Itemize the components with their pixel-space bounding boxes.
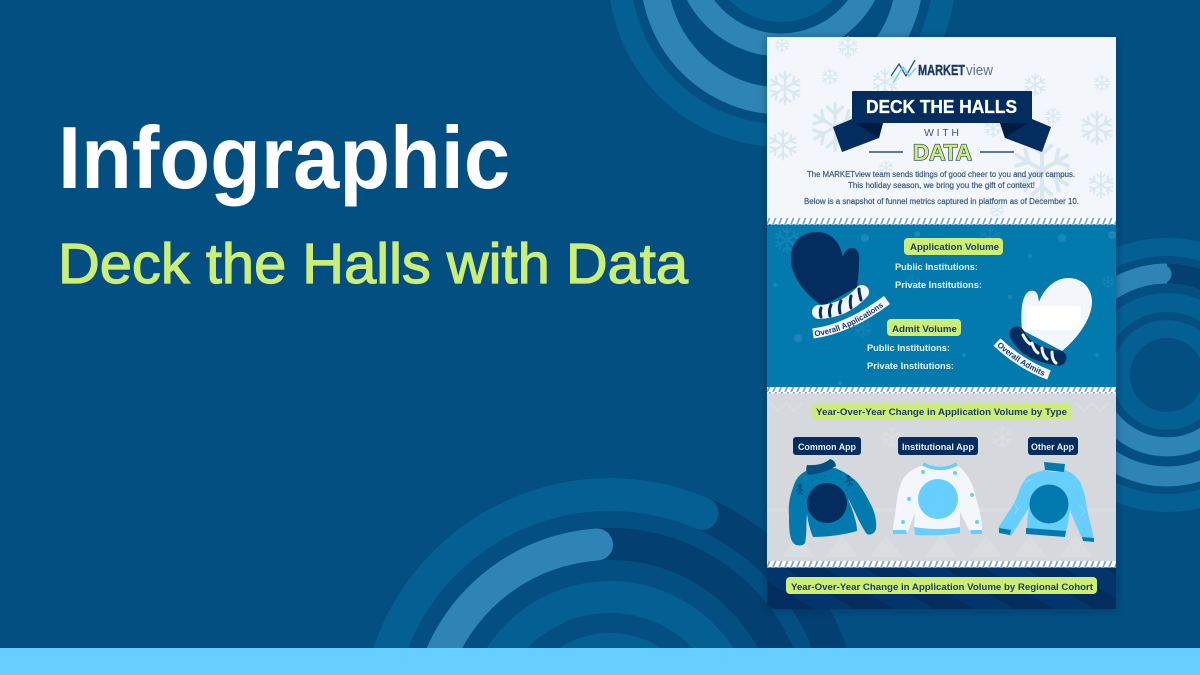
panel: intro [767, 37, 1116, 218]
panel: regional cohort [767, 561, 1116, 609]
application volume rows: Private Institutions: [895, 280, 982, 291]
heading: Infographic: Infographic [58, 108, 510, 207]
pill: Application Volume: Application Volume [910, 242, 999, 253]
text: WITH: WITH [924, 127, 959, 139]
icon: white mitten [1017, 278, 1092, 363]
icon: light blue sweater [998, 462, 1094, 542]
rope divider top [767, 218, 1116, 224]
background rings: top [610, 0, 954, 146]
pill: Admit Volume [887, 319, 961, 336]
pill: by type [812, 403, 1072, 420]
admit volume rows: Public Institutions: [867, 343, 950, 354]
icon: white sweater [893, 464, 982, 536]
application volume rows: Public Institutions: [895, 262, 978, 273]
label: Overall Applications: Overall Applications [814, 304, 883, 336]
rope divider middle [767, 387, 1116, 394]
label: Overall Admits: Overall Admits [998, 342, 1044, 376]
intro text: The MARKETview team sends tidings of good cheer to you and your campus. [807, 170, 1075, 179]
application volume rows [895, 262, 982, 291]
rope divider bottom [767, 561, 1116, 568]
faint decoration [773, 227, 1116, 385]
icon: blue sweater [789, 459, 876, 545]
intro text: This holiday season, we bring you the gift of context! [848, 181, 1035, 190]
snowflakes [768, 37, 1114, 217]
label: Other App: Other App [1031, 442, 1074, 453]
intro text: Below is a snapshot of funnel metrics captured in platform as of December 10. [804, 197, 1079, 206]
background rings: right [1116, 238, 1200, 512]
footer band [0, 648, 1200, 675]
card shadow [767, 37, 1116, 609]
label: Institutional App: Institutional App [902, 442, 974, 453]
ribbon tail left [833, 119, 883, 152]
logo wordmark light: view [966, 62, 993, 79]
pill: by regional cohort: Year-Over-Year Change in Application Volume by Regional Cohort [791, 582, 1094, 593]
text: DATA: DATA [913, 140, 972, 165]
admit volume rows [867, 343, 954, 372]
ribbon fold right [1000, 123, 1028, 138]
ribbon title: DECK THE HALLS [866, 96, 1017, 117]
ribbon fold left [855, 123, 883, 138]
label: Other App [1028, 437, 1078, 455]
pill: Admit Volume: Admit Volume [892, 324, 957, 335]
intro text [804, 170, 1079, 206]
logo [891, 60, 993, 83]
subheading: Deck the Halls with Data: Deck the Halls with Data [58, 232, 688, 296]
ribbon band [852, 91, 1032, 123]
pill: Application Volume [904, 238, 1003, 255]
faint sweater pattern [767, 403, 1116, 557]
lines beside DATA [869, 151, 1014, 153]
label: Common App [793, 437, 861, 455]
label: Institutional App [898, 437, 978, 455]
background rings: bottom [387, 494, 833, 660]
title ribbon [833, 91, 1051, 152]
logo mark [891, 60, 916, 83]
logo wordmark: MARKET [918, 62, 965, 79]
admit volume rows: Private Institutions: [867, 361, 954, 372]
icon: navy mitten [791, 232, 862, 317]
ribbon tail right [1000, 119, 1051, 152]
panel: volume [767, 218, 1116, 387]
panel: application type [767, 387, 1116, 567]
pill: by type: Year-Over-Year Change in Application Volume by Type [816, 407, 1067, 417]
infographic preview card [763, 34, 1120, 613]
pill: by regional cohort [786, 577, 1097, 594]
label: Common App: Common App [798, 442, 856, 453]
